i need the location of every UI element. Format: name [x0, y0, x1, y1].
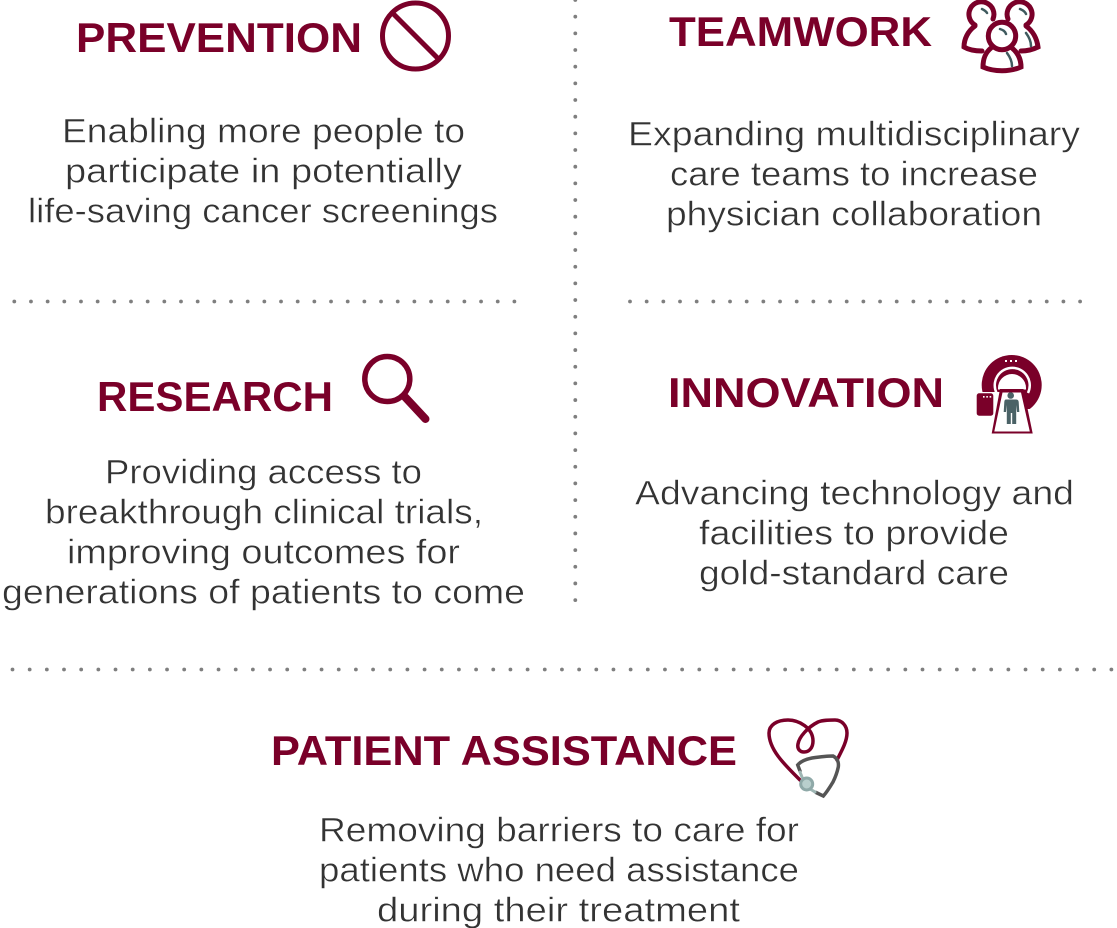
- icon: heart stethoscope: [769, 720, 847, 796]
- icon: MRI scanner: [975, 355, 1045, 434]
- icon: prohibition sign: [382, 3, 448, 69]
- text: prevention description: life-saving cancer screenings: [28, 192, 498, 230]
- text: patient assistance description: patients who need assistance: [319, 852, 799, 890]
- heading: prevention: PREVENTION: [76, 14, 362, 61]
- text: teamwork description: [628, 116, 1080, 234]
- text: innovation description: Advancing technology and: [635, 474, 1074, 512]
- heading: teamwork: TEAMWORK: [669, 8, 932, 55]
- text: innovation description: [635, 474, 1074, 592]
- heading: research: RESEARCH: [97, 373, 333, 420]
- text: patient assistance description: Removing barriers to care for: [319, 812, 799, 850]
- text: teamwork description: physician collaboration: [666, 196, 1042, 234]
- text: teamwork description: Expanding multidisciplinary: [628, 116, 1080, 154]
- text: prevention description: Enabling more people to: [62, 112, 465, 150]
- heading: patient assistance: PATIENT ASSISTANCE: [271, 727, 737, 774]
- text: patient assistance description: [319, 812, 799, 928]
- text: research description: generations of patients to come: [2, 574, 525, 612]
- text: innovation description: gold-standard care: [699, 554, 1009, 592]
- text: research description: improving outcomes for: [67, 534, 460, 572]
- icon: magnifying glass: [365, 356, 426, 419]
- text: prevention description: participate in potentially: [65, 152, 462, 190]
- heading: innovation: INNOVATION: [668, 369, 944, 416]
- text: innovation description: facilities to provide: [699, 514, 1009, 552]
- text: research description: [2, 454, 525, 612]
- text: prevention description: [28, 112, 498, 230]
- text: research description: breakthrough clinical trials,: [45, 494, 483, 532]
- text: research description: Providing access to: [105, 454, 422, 492]
- text: teamwork description: care teams to increase: [670, 156, 1038, 194]
- icon: team of people: [964, 2, 1038, 71]
